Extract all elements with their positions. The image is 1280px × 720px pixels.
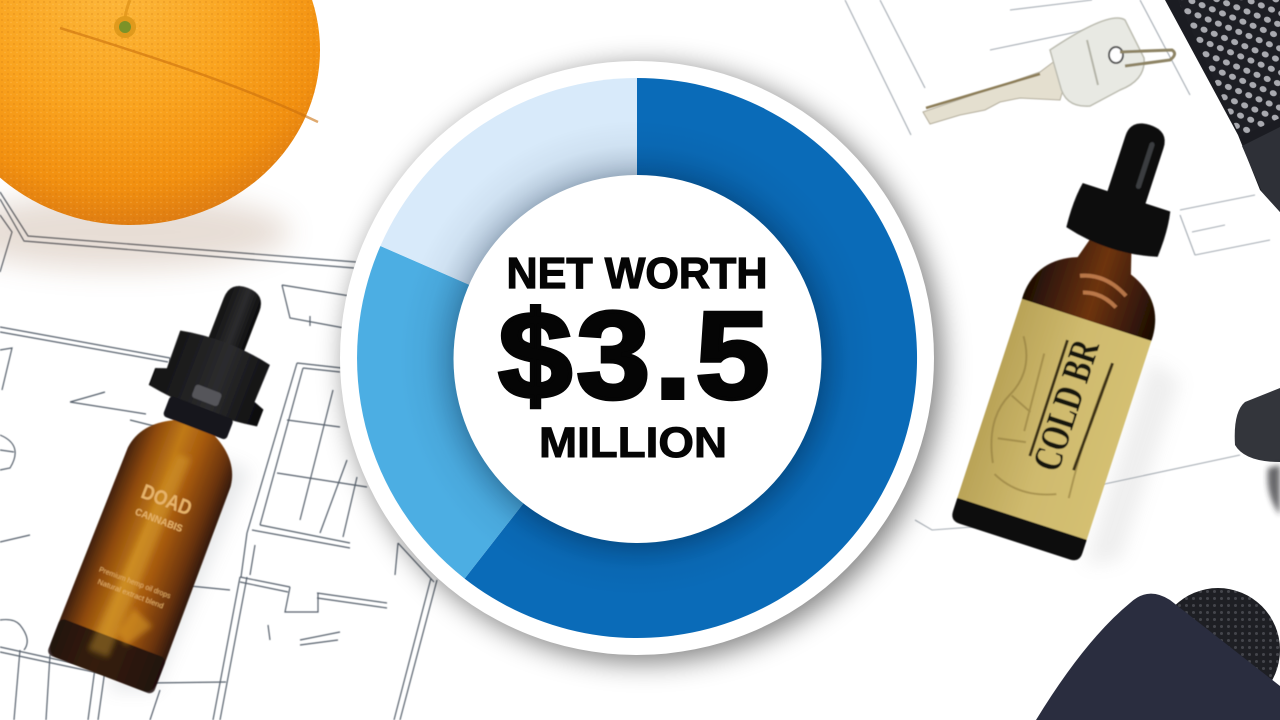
bottle body — [46, 408, 247, 695]
dropper cap — [1064, 182, 1173, 263]
bottle glass — [1016, 226, 1175, 359]
bottle label text: CANNABIS — [133, 507, 184, 535]
donut card shadow — [346, 66, 942, 662]
segment: mid blue — [357, 246, 637, 579]
left bottle shadow — [108, 455, 250, 690]
bottle label text: COLD BR — [1024, 333, 1108, 476]
dropper cap — [147, 322, 281, 431]
key — [923, 18, 1175, 124]
orange shadow — [0, 194, 290, 270]
segment: dark blue — [465, 78, 917, 638]
label: net worth: NET WORTH — [506, 249, 768, 298]
left amber dropper bottle — [45, 267, 302, 695]
value: $3.5: $3.5 — [498, 287, 774, 425]
white card — [340, 61, 934, 655]
icon: orange — [0, 0, 320, 225]
blueprint plan: upper right — [845, 0, 1270, 530]
dropper bulb — [1106, 119, 1169, 207]
centre hub — [454, 175, 822, 543]
label: million: MILLION — [539, 419, 727, 467]
bottle label text: Premium hemp oil drops — [98, 567, 172, 601]
microphone: right band — [1235, 388, 1280, 515]
bottle label text: DOAD — [138, 480, 195, 520]
dropper bulb — [200, 281, 266, 374]
blueprint plan: lower left — [0, 192, 437, 720]
bottle label text — [94, 476, 207, 612]
gold label — [957, 299, 1151, 540]
donut chart panel — [340, 61, 934, 655]
microphone: bottom right — [1036, 588, 1280, 720]
centre hub shadow — [454, 176, 826, 548]
ring inner shade — [357, 78, 917, 638]
bottle base — [950, 488, 1090, 563]
right bottle shadow — [1085, 360, 1180, 565]
microphone: top right — [1165, 0, 1280, 212]
bottle highlight — [88, 449, 191, 660]
segment: pale blue — [380, 78, 637, 358]
right gold-label dropper bottle — [950, 104, 1215, 563]
bottle label text: Natural extract blend — [96, 579, 164, 611]
